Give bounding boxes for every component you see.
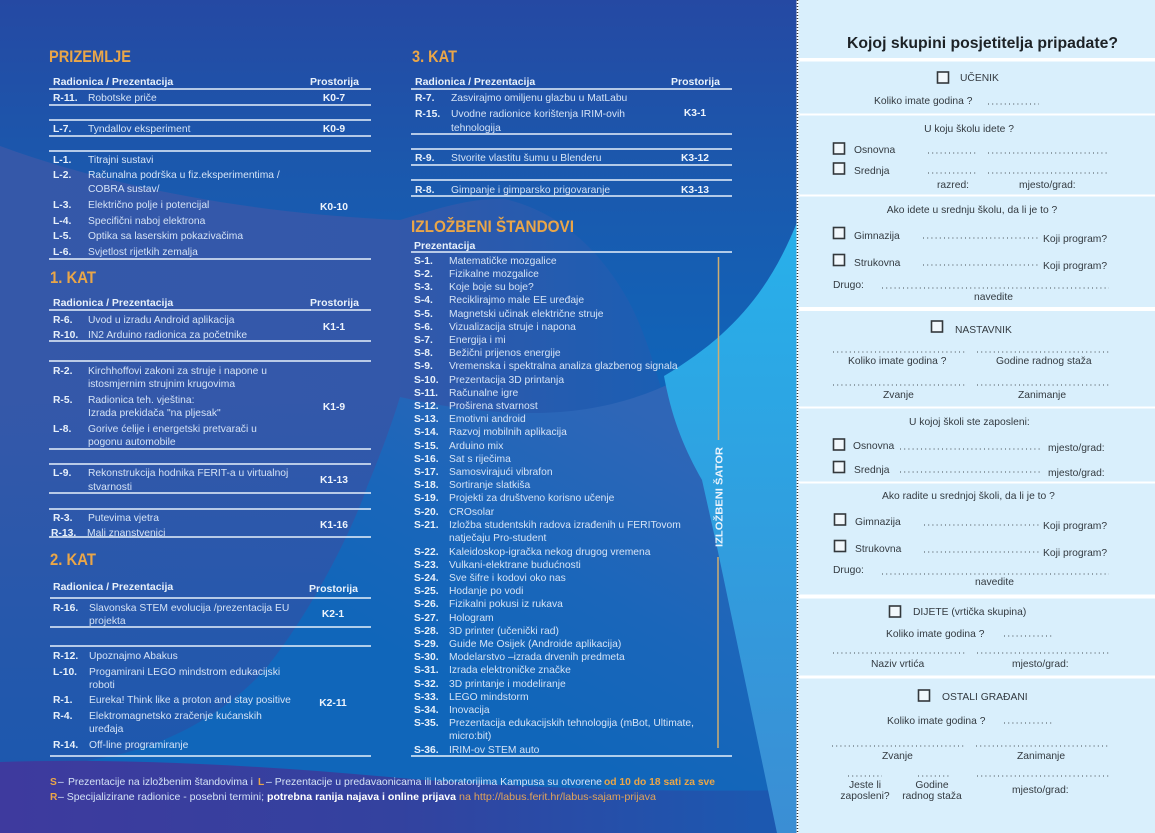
table: izložbeni štandovi: S-9. [414, 361, 433, 372]
table: 2. kat: Elektromagnetsko zračenje kućanskih [89, 711, 262, 722]
table: izložbeni štandovi: Fizikalni pokusi iz rukava [449, 599, 563, 610]
table: 1. kat: Kirchhoffovi zakoni za struje i napone u [88, 366, 267, 377]
section: ostali građani: radnog staža [902, 791, 962, 802]
table: prizemlje: L-2. [53, 170, 71, 181]
table: izložbeni štandovi: Magnetski učinak električne struje [449, 309, 604, 320]
table: izložbeni štandovi: LEGO mindstorm [449, 692, 529, 703]
table: izložbeni štandovi: S-14. [414, 427, 439, 438]
table: 2. kat: Radionica / Prezentacija [53, 581, 173, 593]
section: ostali građani: OSTALI GRAĐANI [942, 692, 1028, 703]
table: izložbeni štandovi: Modelarstvo –izrada drvenih predmeta [449, 652, 625, 663]
section: vrsta srednje škole nastavnika: Drugo: [833, 565, 864, 576]
heading: 2. KAT: 2. KAT [50, 551, 96, 569]
section: nastavnik: Zvanje [883, 390, 914, 401]
table: 1. kat: R-13. [51, 528, 76, 539]
table: 1. kat: R-2. [53, 366, 73, 377]
table: izložbeni štandovi: Sat s riječima [449, 454, 511, 465]
footnote: Prezentacije na izložbenim štandovima i [68, 777, 253, 788]
heading: 3. KAT: 3. KAT [412, 48, 457, 66]
table: izložbeni štandovi: S-4. [414, 295, 433, 306]
table: 1. kat: L-8. [53, 424, 71, 435]
table: izložbeni štandovi: S-6. [414, 322, 433, 333]
table: izložbeni štandovi: 3D printanje i modeliranje [449, 679, 566, 690]
footnote: – Prezentacije u predavaonicama ili laboratorijima Kampusa su otvorene [266, 777, 602, 788]
table: izložbeni štandovi: Vremenska i spektralna analiza glazbenog signala [449, 361, 678, 372]
table: izložbeni štandovi: S-34. [414, 705, 439, 716]
table: izložbeni štandovi: S-8. [414, 348, 433, 359]
section: vrsta srednje škole nastavnika: Koji program? [1043, 548, 1107, 559]
footnote: S [50, 777, 57, 788]
table: 1. kat: Mali znanstvenici [87, 528, 165, 539]
section: dijete: mjesto/grad: [1012, 659, 1069, 670]
table: 1. kat: Radionica teh. vještina: [88, 395, 194, 406]
table: izložbeni štandovi: S-5. [414, 309, 433, 320]
table: prizemlje: K0-9 [323, 124, 345, 135]
table: izložbeni štandovi: S-21. [414, 520, 439, 531]
table: prizemlje: L-1. [53, 155, 71, 166]
table: izložbeni štandovi: S-32. [414, 679, 439, 690]
table: izložbeni štandovi: Koje boje su boje? [449, 282, 534, 293]
table: prizemlje: R-11. [53, 93, 78, 104]
table: izložbeni štandovi: Fizikalne mozgalice [449, 269, 539, 280]
section: škola učenika: Osnovna [854, 145, 895, 156]
section: škola nastavnika [834, 417, 1105, 479]
table: 2. kat: Slavonska STEM evolucija /prezentacija EU [89, 603, 289, 614]
table: izložbeni štandovi: S-16. [414, 454, 439, 465]
table: 1. kat: istosmjernim strujnim krugovima [88, 379, 235, 390]
table: izložbeni štandovi: Projekti za društveno korisno učenje [449, 493, 615, 504]
table: izložbeni štandovi: S-36. [414, 745, 439, 756]
section: vrsta srednje škole nastavnika: Koji program? [1043, 521, 1107, 532]
table: 3. kat: R-9. [415, 153, 435, 164]
section: nastavnik: Koliko imate godina ? [848, 356, 947, 367]
panel: visitor questionnaire background [798, 0, 1155, 833]
section: nastavnik [833, 321, 1109, 401]
table: izložbeni štandovi: S-22. [414, 547, 439, 558]
table: izložbeni štandovi: natječaju Pro-student [449, 533, 546, 544]
table: 1. kat: R-3. [53, 513, 73, 524]
table: 2. kat: R-16. [53, 603, 78, 614]
section: škola nastavnika: Srednja [854, 465, 890, 476]
table: izložbeni štandovi: 3D printer (učenički rad) [449, 626, 559, 637]
table: 3. kat: Prostorija [671, 76, 720, 88]
table: izložbeni štandovi: S-28. [414, 626, 439, 637]
section: vrsta srednje škole učenika [833, 205, 1109, 303]
table: 1. kat: K1-9 [323, 402, 345, 413]
section: škola nastavnika: Osnovna [853, 441, 894, 452]
table: prizemlje: Robotske priče [88, 93, 157, 104]
section: vrsta srednje škole učenika: Strukovna [854, 258, 901, 269]
table: prizemlje: Tyndallov eksperiment [88, 124, 191, 135]
table: 2. kat: R-12. [53, 651, 78, 662]
section: vrsta srednje škole nastavnika: Gimnazija [855, 517, 901, 528]
table: izložbeni štandovi: S-26. [414, 599, 439, 610]
table: izložbeni štandovi: S-29. [414, 639, 439, 650]
table: 2. kat: R-4. [53, 711, 73, 722]
table: izložbeni štandovi: Vizualizacija struje i napona [449, 322, 576, 333]
table: 2. kat: Upoznajmo Abakus [89, 651, 178, 662]
table: 1. kat: R-6. [53, 315, 73, 326]
table: 3. kat: Zasvirajmo omiljenu glazbu u MatLabu [451, 93, 628, 104]
table: izložbeni štandovi: Energija i mi [449, 335, 506, 346]
section: nastavnik: NASTAVNIK [955, 325, 1012, 336]
section: škola učenika: U koju školu idete ? [924, 124, 1014, 135]
table: izložbeni štandovi: Bežični prijenos energije [449, 348, 561, 359]
section: škola učenika: Srednja [854, 166, 890, 177]
table: izložbeni štandovi: Hodanje po vodi [449, 586, 523, 597]
footnote: – [58, 777, 64, 788]
section: ostali građani: Godine [915, 780, 949, 791]
table: izložbeni štandovi: Reciklirajmo male EE uređaje [449, 295, 584, 306]
table: izložbeni štandovi: S-19. [414, 493, 439, 504]
table: 3. kat: Radionica / Prezentacija [415, 76, 535, 88]
table: izložbeni štandovi: CROsolar [449, 507, 495, 518]
section: škola nastavnika: mjesto/grad: [1048, 443, 1105, 454]
section: vrsta srednje škole nastavnika: navedite [975, 577, 1014, 588]
table: 1. kat: L-9. [53, 468, 71, 479]
table: izložbeni štandovi: Guide Me Osijek (Androide aplikacija) [449, 639, 621, 650]
table: 2. kat: Prostorija [309, 583, 358, 595]
table: prizemlje: L-5. [53, 231, 71, 242]
table: 2. kat: uređaja [89, 724, 124, 735]
heading: 1. KAT: 1. KAT [50, 269, 96, 287]
footnote: L [258, 777, 264, 788]
section: ostali građani: Zanimanje [1017, 751, 1065, 762]
section: škola učenika [834, 124, 1109, 191]
table: 1. kat: Gorive ćelije i energetski pretvarači u [88, 424, 257, 435]
section: učenik: UČENIK [960, 71, 999, 84]
table: izložbeni štandovi: Prezentacija edukacijskih tehnologija (mBot, Ultimate, [449, 718, 694, 729]
section: vrsta srednje škole nastavnika: Strukovna [855, 544, 902, 555]
table: izložbeni štandovi: S-15. [414, 441, 439, 452]
table: prizemlje: K0-7 [323, 93, 345, 104]
table: izložbeni štandovi: Inovacija [449, 705, 490, 716]
table: 2. kat: L-10. [53, 667, 77, 678]
section: ostali građani: Jeste li [849, 780, 881, 791]
table: 1. kat: R-5. [53, 395, 73, 406]
table: izložbeni štandovi: S-11. [414, 388, 438, 399]
table: prizemlje: L-4. [53, 216, 71, 227]
table: izložbeni štandovi: Izložba studentskih radova izrađenih u FERITovom [449, 520, 681, 531]
section: škola učenika: razred: [937, 180, 969, 191]
table: 2. kat: projekta [89, 616, 126, 627]
table: izložbeni štandovi: Izrada elektroničke značke [449, 665, 571, 676]
footnote: – Specijalizirane radionice - posebni termini; [58, 792, 264, 803]
table: prizemlje: COBRA sustav/ [88, 184, 160, 195]
table: izložbeni štandovi: S-30. [414, 652, 439, 663]
table: 1. kat: Prostorija [310, 297, 359, 309]
table: izložbeni štandovi: IRIM-ov STEM auto [449, 745, 540, 756]
table: izložbeni štandovi: S-17. [414, 467, 439, 478]
footnote: na http://labus.ferit.hr/labus-sajam-prijava [459, 792, 656, 803]
section: vrsta srednje škole učenika: navedite [974, 292, 1013, 303]
table: 3. kat: Stvorite vlastitu šumu u Blenderu [451, 153, 602, 164]
table: 2. kat: K2-1 [322, 609, 344, 620]
table: prizemlje [49, 76, 371, 259]
table: izložbeni štandovi: Samosvirajući vibrafon [449, 467, 553, 478]
table: izložbeni štandovi: Sve šifre i kodovi oko nas [449, 573, 566, 584]
table: izložbeni štandovi [411, 240, 732, 756]
table: izložbeni štandovi: Prezentacija 3D printanja [449, 375, 564, 386]
table: izložbeni štandovi: S-2. [414, 269, 433, 280]
section: škola učenika: mjesto/grad: [1019, 180, 1076, 191]
table: 2. kat: Progamirani LEGO mindstrom edukacijski [89, 667, 280, 678]
table: 2. kat: Off-line programiranje [89, 740, 189, 751]
table: 1. kat: Izrada prekidača "na pljesak" [88, 408, 221, 419]
section: ostali građani: Koliko imate godina ? [887, 716, 986, 727]
table: prizemlje: L-6. [53, 247, 71, 258]
table: 3. kat: K3-12 [681, 153, 709, 164]
table: 3. kat: tehnologija [451, 123, 501, 134]
table: izložbeni štandovi: Hologram [449, 613, 494, 624]
section: ostali građani: mjesto/grad: [1012, 785, 1069, 796]
table: 2. kat [50, 581, 371, 756]
table: 1. kat: K1-13 [320, 475, 348, 486]
section: učenik [874, 71, 1039, 107]
section: vrsta srednje škole učenika: Koji program? [1043, 261, 1107, 272]
table: prizemlje: Radionica / Prezentacija [53, 76, 173, 88]
section: nastavnik: Zanimanje [1018, 390, 1066, 401]
footnote: potrebna ranija najava i online prijava [267, 792, 456, 803]
section: nastavnik: Godine radnog staža [996, 356, 1092, 367]
table: prizemlje: K0-10 [320, 202, 348, 213]
table: izložbeni štandovi: S-27. [414, 613, 439, 624]
table: 1. kat: Putevima vjetra [88, 513, 159, 524]
table: prizemlje: Titrajni sustavi [88, 155, 153, 166]
section: dijete: Naziv vrtića [871, 659, 924, 670]
table: izložbeni štandovi: S-35. [414, 718, 439, 729]
table: izložbeni štandovi: S-3. [414, 282, 433, 293]
table: izložbeni štandovi: Računalne igre [449, 388, 519, 399]
table: izložbeni štandovi: S-31. [414, 665, 439, 676]
section: vrsta srednje škole učenika: Gimnazija [854, 231, 900, 242]
table: izložbeni štandovi: S-24. [414, 573, 439, 584]
table: izložbeni štandovi: S-1. [414, 256, 433, 267]
table: izložbeni štandovi: micro:bit) [449, 731, 491, 742]
section: dijete: Koliko imate godina ? [886, 629, 985, 640]
table: 3. kat: Uvodne radionice korištenja IRIM-ovih [451, 109, 625, 120]
table: 3. kat: R-8. [415, 185, 435, 196]
table: izložbeni štandovi: Razvoj mobilnih aplikacija [449, 427, 567, 438]
section: dijete: DIJETE (vrtička skupina) [913, 607, 1026, 618]
table: 3. kat: Gimpanje i gimparsko prigovaranje [451, 185, 610, 196]
table: izložbeni štandovi: Kaleidoskop-igračka nekog drugog vremena [449, 547, 651, 558]
table: 2. kat: R-1. [53, 695, 73, 706]
table: prizemlje: Prostorija [310, 76, 359, 88]
section: ostali građani: zaposleni? [840, 791, 890, 802]
table: 2. kat: R-14. [53, 740, 78, 751]
footnote: R [50, 792, 58, 803]
table: 3. kat: R-15. [415, 109, 440, 120]
table: izložbeni štandovi: S-7. [414, 335, 433, 346]
section: ostali građani: Zvanje [882, 751, 913, 762]
table: izložbeni štandovi: S-33. [414, 692, 439, 703]
table: 1. kat: Uvod u izradu Android aplikacija [88, 315, 235, 326]
table: izložbeni štandovi: Emotivni android [449, 414, 526, 425]
table: izložbeni štandovi: S-18. [414, 480, 439, 491]
section: vrsta srednje škole učenika: Ako idete u srednju školu, da li je to ? [887, 205, 1058, 216]
section: vrsta srednje škole učenika: Drugo: [833, 280, 864, 291]
table: 1. kat: R-10. [53, 330, 78, 341]
table: 3. kat [411, 76, 732, 196]
table: 2. kat: roboti [89, 680, 115, 691]
section: škola nastavnika: U kojoj školi ste zaposleni: [909, 417, 1030, 428]
table: 1. kat: K1-1 [323, 322, 345, 333]
table: 1. kat [49, 297, 371, 539]
table: 1. kat: stvarnosti [88, 482, 132, 493]
table: 1. kat: IN2 Arduino radionica za početnike [88, 330, 247, 341]
section: vrsta srednje škole nastavnika [833, 491, 1109, 588]
table: izložbeni štandovi: S-20. [414, 507, 439, 518]
table: 3. kat: R-7. [415, 93, 435, 104]
table: izložbeni štandovi: Sortiranje slatkiša [449, 480, 531, 491]
table: izložbeni štandovi: S-10. [414, 375, 439, 386]
table: 3. kat: K3-1 [684, 108, 706, 119]
section: škola nastavnika: mjesto/grad: [1048, 468, 1105, 479]
panel: blue programme background [0, 0, 798, 833]
table: 2. kat: K2-11 [319, 698, 347, 709]
table: izložbeni štandovi: S-23. [414, 560, 439, 571]
table: 2. kat: Eureka! Think like a proton and stay positive [89, 695, 291, 706]
table: prizemlje: L-7. [53, 124, 71, 135]
icon: checkbox učenik [938, 72, 948, 83]
label: izložbeni šator vertical bracket: IZLOŽBENI ŠATOR [712, 447, 726, 547]
table: izložbeni štandovi: Arduino mix [449, 441, 504, 452]
table: prizemlje: Svjetlost rijetkih zemalja [88, 247, 198, 258]
table: izložbeni štandovi: Prezentacija [414, 240, 475, 252]
title: questionnaire: Kojoj skupini posjetitelja pripadate? [847, 35, 1118, 52]
table: izložbeni štandovi: S-13. [414, 414, 439, 425]
table: izložbeni štandovi: Matematičke mozgalice [449, 256, 557, 267]
section: ostali građani [832, 690, 1109, 802]
table: 1. kat: Rekonstrukcija hodnika FERIT-a u virtualnoj [88, 468, 288, 479]
section: vrsta srednje škole nastavnika: Ako radite u srednjoj školi, da li je to ? [882, 491, 1055, 502]
section: dijete [833, 606, 1109, 670]
heading: IZLOŽBENI ŠTANDOVI: IZLOŽBENI ŠTANDOVI [411, 217, 574, 236]
table: prizemlje: Električno polje i potencijal [88, 200, 209, 211]
heading: PRIZEMLJE: PRIZEMLJE [49, 48, 131, 66]
table: izložbeni štandovi: S-12. [414, 401, 439, 412]
table: izložbeni štandovi: Vulkani-elektrane budućnosti [449, 560, 581, 571]
footnote: od 10 do 18 sati za sve [604, 777, 715, 788]
footnote [50, 777, 715, 803]
table: prizemlje: Optika sa laserskim pokazivačima [88, 231, 243, 242]
table: izložbeni štandovi: S-25. [414, 586, 439, 597]
table: prizemlje: Računalna podrška u fiz.eksperimentima / [88, 170, 280, 181]
table: prizemlje: Specifični naboj elektrona [88, 216, 206, 227]
table: 1. kat: pogonu automobile [88, 437, 176, 448]
table: izložbeni štandovi: Proširena stvarnost [449, 401, 538, 412]
table: prizemlje: L-3. [53, 200, 71, 211]
section: učenik: Koliko imate godina ? [874, 96, 973, 107]
table: 1. kat: K1-16 [320, 520, 348, 531]
table: 1. kat: Radionica / Prezentacija [53, 297, 173, 309]
section: vrsta srednje škole učenika: Koji program? [1043, 234, 1107, 245]
table: 3. kat: K3-13 [681, 185, 709, 196]
